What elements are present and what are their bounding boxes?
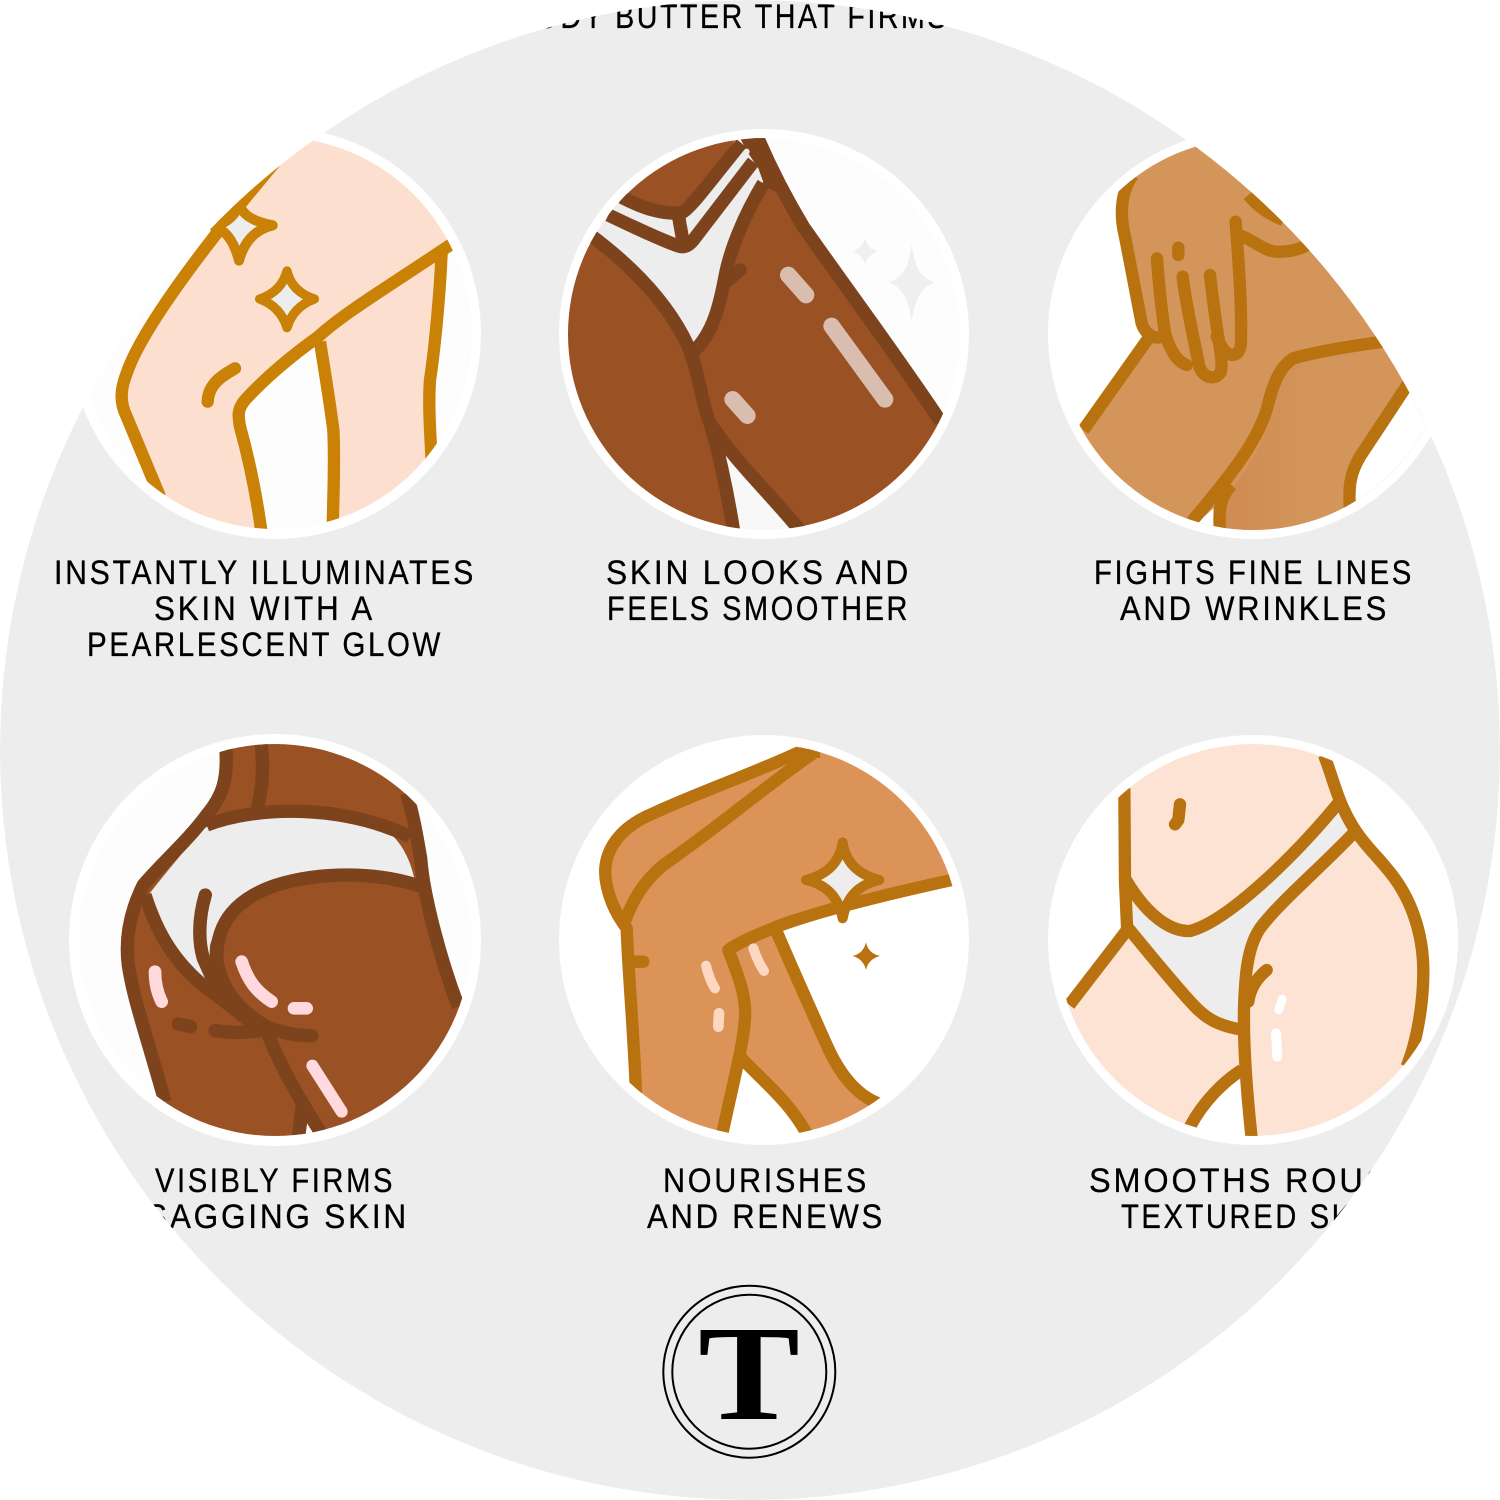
caption: FEELS SMOOTHER xyxy=(607,590,910,628)
caption xyxy=(154,1168,404,1228)
illustration: hand on thigh xyxy=(1079,146,1426,530)
badge circle xyxy=(1048,735,1458,1145)
logo: T xyxy=(698,1298,800,1449)
panel: smooths xyxy=(1048,735,1458,1228)
caption: NOURISHES xyxy=(663,1162,869,1200)
caption xyxy=(1096,560,1410,620)
caption: SMOOTHS ROUGH, xyxy=(1089,1162,1432,1200)
caption: TEXTURED SKIN xyxy=(1121,1198,1388,1236)
caption: INSTANTLY ILLUMINATES xyxy=(54,554,476,592)
panel: smoother xyxy=(550,120,990,628)
caption: VISIBLY FIRMS xyxy=(155,1162,395,1200)
badge circle xyxy=(559,735,969,1145)
caption xyxy=(646,1168,881,1228)
caption: AND WRINKLES xyxy=(1120,590,1389,628)
badge circle xyxy=(69,127,481,539)
caption: SKIN WITH A xyxy=(154,590,375,628)
illustration: hips xyxy=(1057,744,1449,1136)
caption: FIGHTS FINE LINES xyxy=(1094,554,1414,592)
caption xyxy=(1090,1168,1372,1228)
caption: SAGGING SKIN xyxy=(146,1198,409,1236)
illustration: smooth brown skin xyxy=(568,138,944,528)
badge circle xyxy=(69,734,481,1146)
illustration: knee xyxy=(599,746,952,1133)
panel: illuminates xyxy=(56,133,481,656)
caption: SKIN LOOKS AND xyxy=(606,554,911,592)
panel: nourishes xyxy=(559,725,983,1236)
badge circle xyxy=(559,129,969,539)
logo xyxy=(663,1286,835,1458)
badge circle xyxy=(1048,129,1458,539)
illustration: firm curves xyxy=(120,744,462,1136)
caption: AND RENEWS xyxy=(647,1198,885,1236)
panel: firms xyxy=(60,725,500,1236)
panel: fine lines xyxy=(1048,140,1430,620)
caption xyxy=(56,560,472,656)
illustration: glowing thigh xyxy=(116,140,471,529)
caption: PEARLESCENT GLOW xyxy=(87,626,443,664)
caption xyxy=(607,560,907,620)
